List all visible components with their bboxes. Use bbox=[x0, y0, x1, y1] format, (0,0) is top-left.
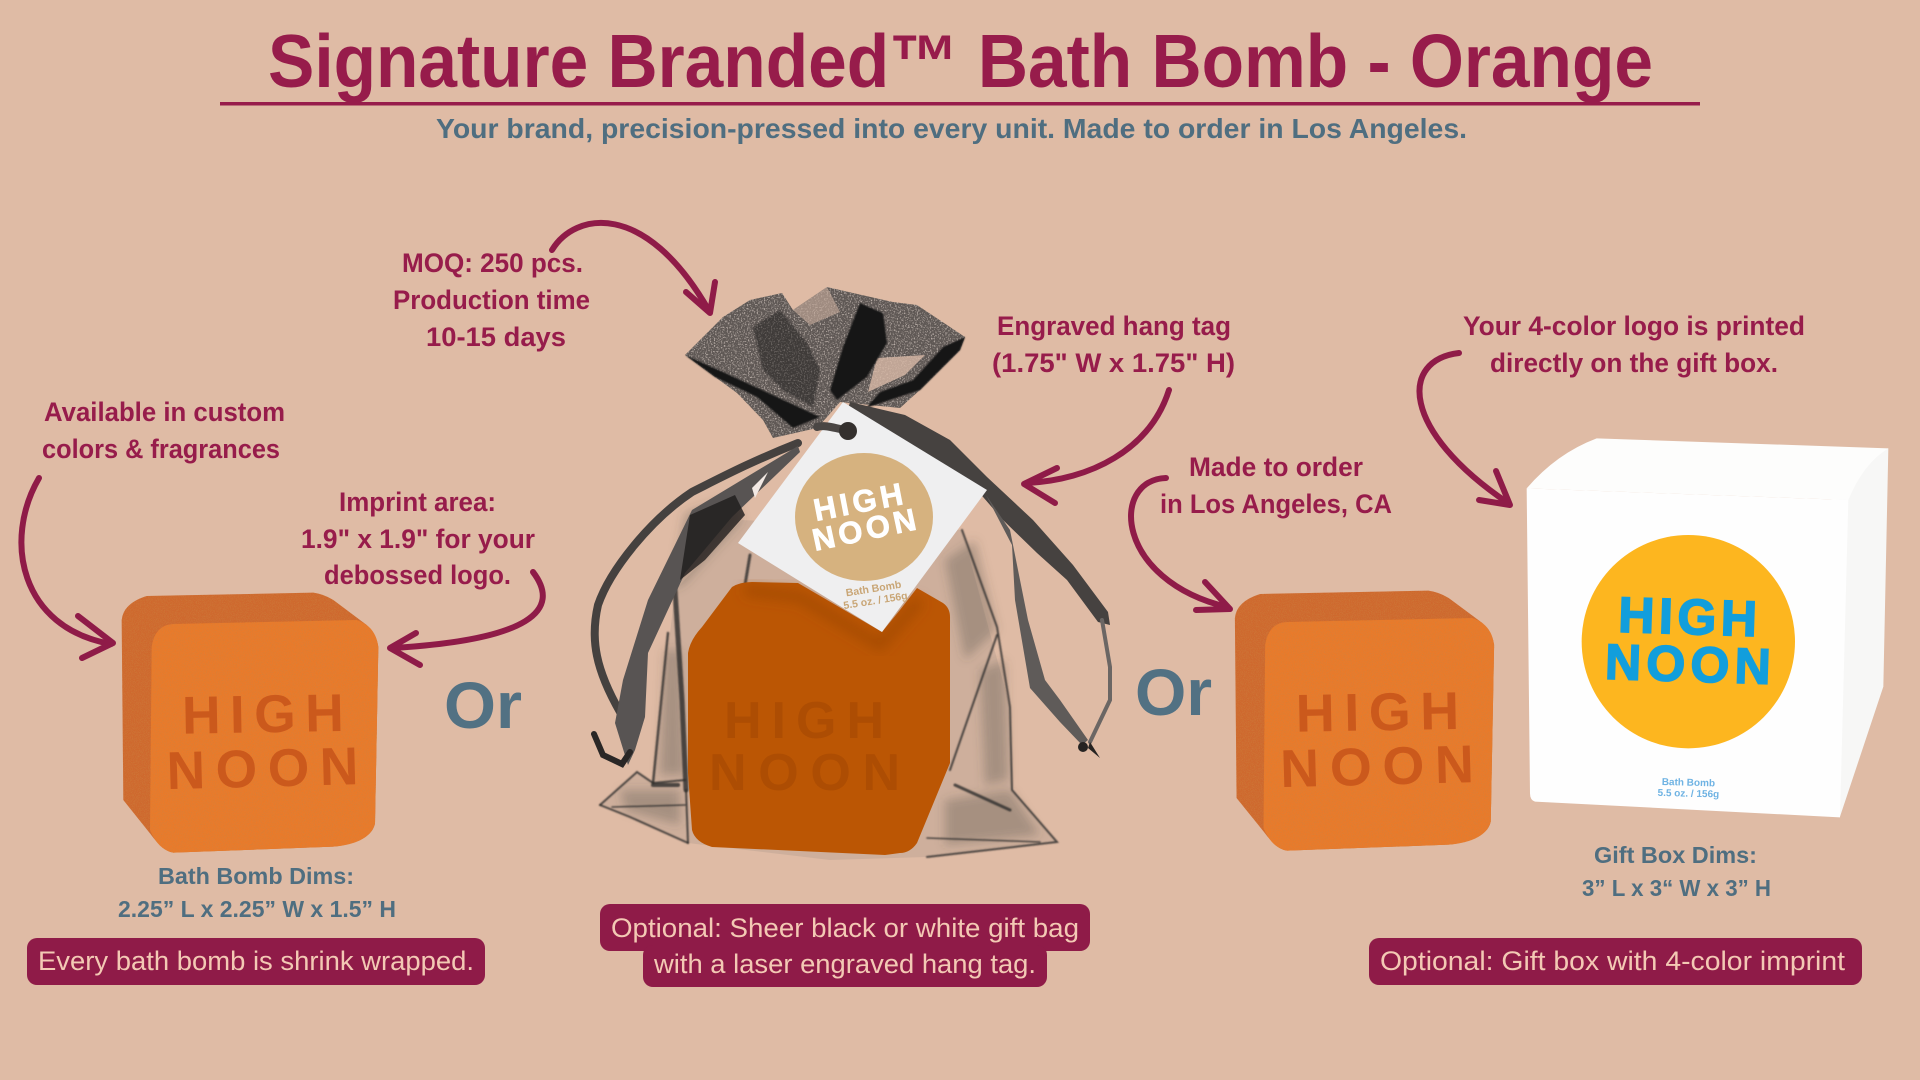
product: gift bag with hang tag bbox=[594, 287, 1110, 860]
label: gift box dimensions: 3” L x 3“ W x 3” H bbox=[1582, 875, 1771, 901]
arrow: custom colors to bath bomb bbox=[21, 478, 113, 658]
arrow: MOQ to gift bag bbox=[552, 223, 715, 313]
sheer bag body bbox=[600, 520, 1057, 860]
callout: imprint area: Imprint area: bbox=[339, 487, 496, 517]
callout: MOQ and production time: Production time bbox=[393, 285, 590, 315]
bath bomb inside bag: NOON bbox=[709, 744, 900, 802]
callout: custom colors bbox=[42, 397, 285, 464]
callout: MOQ and production time: 10-15 days bbox=[426, 322, 566, 352]
product: left bath bomb bbox=[122, 593, 378, 853]
product: left bath bomb: HIGH bbox=[182, 684, 344, 746]
callout: engraved hang tag bbox=[992, 311, 1235, 378]
callout: made to order: in Los Angeles, CA bbox=[1160, 489, 1392, 519]
bath bomb inside bag: HIGH bbox=[724, 692, 884, 750]
callout: custom colors: colors & fragrances bbox=[42, 434, 280, 464]
label: or left: Or bbox=[444, 668, 522, 742]
arrow: 4-color logo to gift box bbox=[1420, 353, 1510, 505]
callout: 4-color logo: Your 4-color logo is printed bbox=[1463, 311, 1805, 341]
bath bomb inside bag bbox=[688, 582, 950, 855]
product: gift box: 5.5 oz. / 156g bbox=[1657, 788, 1719, 800]
right ribbons bbox=[845, 402, 1110, 758]
hang tag: Bath Bomb bbox=[845, 579, 902, 599]
pill: optional gift bag bbox=[600, 904, 1090, 987]
product: left bath bomb: NOON bbox=[166, 737, 359, 801]
bag streak shading bbox=[620, 497, 1040, 845]
label: bath bomb dimensions: 2.25” L x 2.25” W x 1.5” H bbox=[118, 896, 396, 922]
callout: 4-color logo bbox=[1463, 311, 1805, 378]
label: gift box dimensions: Gift Box Dims: bbox=[1594, 842, 1757, 868]
product: right bath bomb: HIGH bbox=[1295, 681, 1460, 744]
product: gift box bbox=[1527, 438, 1888, 817]
callout: engraved hang tag: Engraved hang tag bbox=[997, 311, 1231, 341]
pill: optional gift bag: with a laser engraved hang tag. bbox=[653, 949, 1036, 979]
hang tag: HIGH bbox=[811, 476, 906, 528]
bag edge strands bbox=[600, 530, 1057, 857]
hang tag: NOON bbox=[809, 502, 919, 558]
product: right bath bomb bbox=[1235, 591, 1494, 851]
callout: made to order bbox=[1160, 452, 1392, 519]
pill: optional gift box bbox=[1369, 938, 1862, 985]
left ribbons bbox=[594, 443, 800, 765]
callout: imprint area: 1.9" x 1.9" for your bbox=[301, 524, 535, 554]
product: gift box: Bath Bomb bbox=[1662, 777, 1715, 789]
ruffle light area bbox=[868, 355, 925, 392]
product: gift box: HIGH bbox=[1618, 587, 1758, 647]
callout: 4-color logo: directly on the gift box. bbox=[1490, 348, 1778, 378]
callout: imprint area: debossed logo. bbox=[324, 560, 511, 590]
product: gift box: NOON bbox=[1604, 634, 1772, 695]
arrow: hang tag bbox=[1024, 390, 1169, 503]
label: bath bomb dimensions bbox=[118, 863, 396, 922]
hang tag: 5.5 oz. / 156g bbox=[843, 590, 908, 612]
ruffle dark folds bbox=[685, 303, 965, 428]
callout: custom colors: Available in custom bbox=[44, 397, 285, 427]
callout: engraved hang tag: (1.75" W x 1.75" H) bbox=[992, 348, 1235, 378]
callout: made to order: Made to order bbox=[1189, 452, 1363, 482]
arrow: imprint area to bath bomb bbox=[390, 572, 543, 665]
label: gift box dimensions bbox=[1582, 842, 1771, 901]
product: right bath bomb: NOON bbox=[1280, 734, 1475, 799]
bag neck ruffle bbox=[685, 287, 965, 438]
subtitle: Your brand, precision-pressed into every unit. Made to order in Los Angeles. bbox=[436, 113, 1467, 144]
callout: imprint area bbox=[301, 487, 535, 590]
label: bath bomb dimensions: Bath Bomb Dims: bbox=[158, 863, 354, 889]
label: or right: Or bbox=[1135, 655, 1212, 729]
pill: shrink wrapped: Every bath bomb is shrink wrapped. bbox=[38, 946, 474, 976]
callout: MOQ and production time: MOQ: 250 pcs. bbox=[402, 248, 583, 278]
arrow: made to order to bath bomb bbox=[1131, 478, 1230, 610]
callout: MOQ and production time bbox=[393, 248, 590, 352]
pill: optional gift bag: Optional: Sheer black or white gift bag bbox=[611, 913, 1079, 943]
title: Signature Branded™ Bath Bomb - Orange bbox=[268, 19, 1653, 103]
hang tag bbox=[738, 402, 987, 632]
pill: shrink wrapped bbox=[27, 938, 485, 985]
pill: optional gift box: Optional: Gift box with 4-color imprint bbox=[1380, 946, 1846, 976]
